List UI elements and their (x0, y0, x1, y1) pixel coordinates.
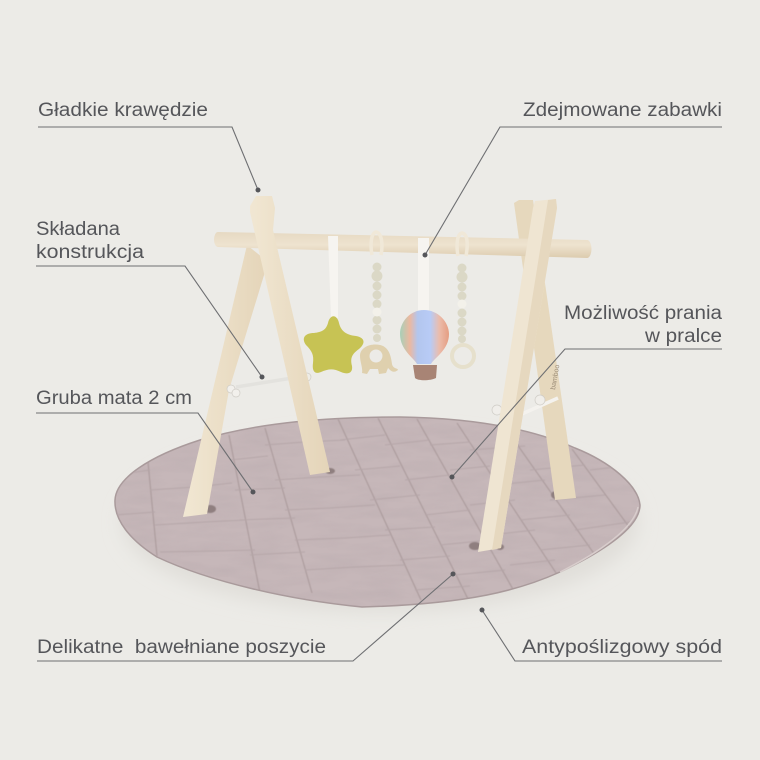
toy: yellow star (304, 316, 364, 373)
cord left (227, 373, 311, 397)
mat shadow (122, 432, 638, 612)
callout: smooth edges (38, 100, 260, 192)
callout: removable toys: Zdejmowane zabawki (523, 100, 722, 121)
horizontal wooden bar (214, 232, 592, 258)
callout: machine washable (450, 303, 722, 480)
product infographic (36, 102, 722, 662)
callout: smooth edges: Gładkie krawędzie (38, 100, 208, 121)
right frame front leg (478, 199, 557, 552)
toy: beads and elephant (360, 232, 398, 374)
callout: anti-slip base: Antypoślizgowy spód (522, 637, 722, 658)
toy ribbon for star (328, 236, 338, 318)
callout: machine washable: Możliwość prania (564, 303, 722, 324)
callout: folding construction: konstrukcja (36, 242, 144, 263)
toy: hot air balloon (400, 238, 449, 380)
cord right (492, 395, 558, 417)
quilted mat (110, 410, 645, 610)
callout: thick mat (36, 388, 256, 494)
callout: cotton cover: Delikatne bawełniane poszycie (37, 637, 326, 658)
callout: thick mat: Gruba mata 2 cm (36, 388, 192, 409)
left frame rear leg (183, 245, 268, 517)
left frame front leg (250, 196, 330, 475)
foot holes in mat (204, 468, 561, 550)
brand mark on leg: bamboo (550, 364, 561, 390)
callout: anti-slip base (480, 608, 722, 661)
callout: machine washable: w pralce (644, 326, 722, 347)
callout: cotton cover (37, 572, 456, 661)
callout: removable toys (422, 100, 722, 258)
right frame back leg (514, 200, 576, 500)
callout: folding construction: Składana (36, 219, 120, 240)
toy: beads and ring (452, 233, 474, 367)
callout: folding construction (36, 219, 264, 380)
